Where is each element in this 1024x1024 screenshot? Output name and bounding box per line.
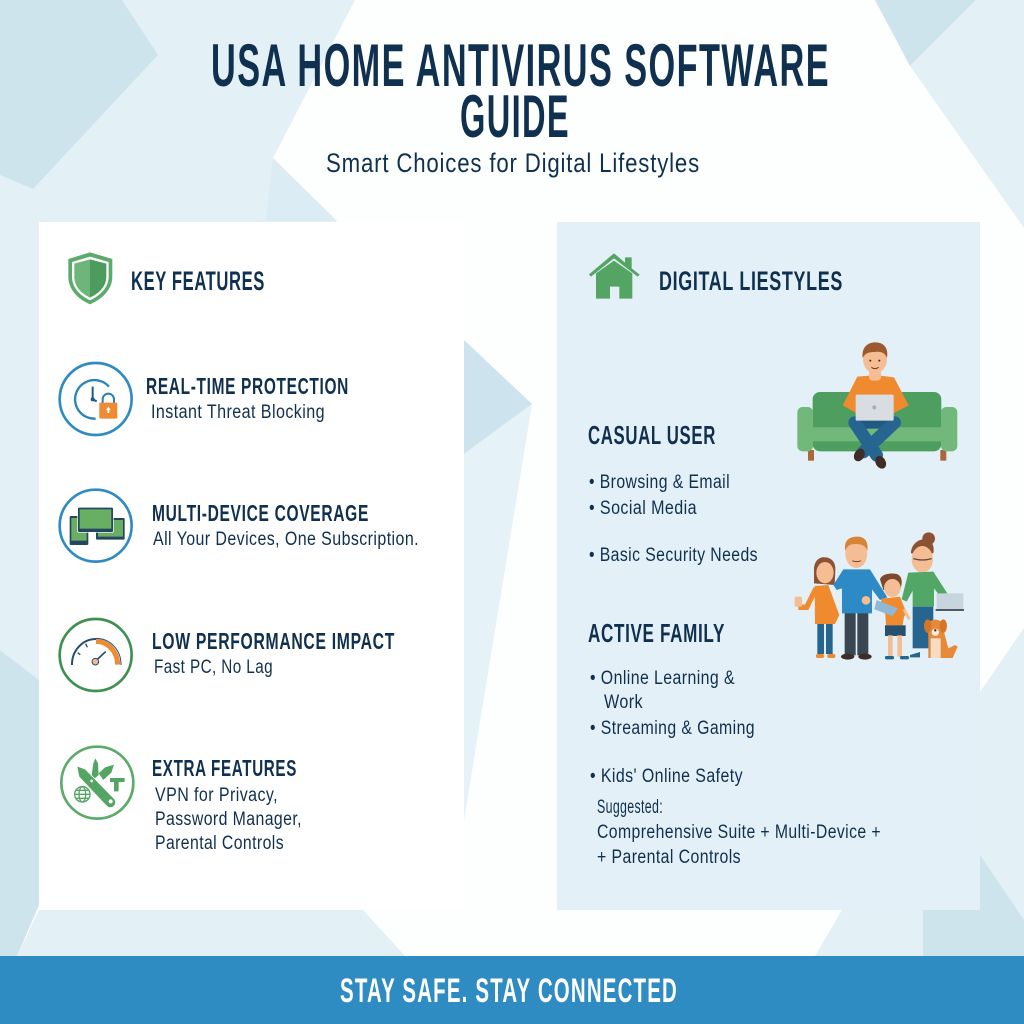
icon: clock and lock <box>60 363 132 435</box>
heading: digital liestyles: DIGITAL LIESTYLES <box>659 266 843 296</box>
bullet list: • Online Learning & <box>590 668 735 689</box>
feature: low performance impact <box>60 619 395 691</box>
heading: key features: KEY FEATURES <box>131 266 265 296</box>
mother <box>922 532 935 545</box>
laptop <box>937 593 963 610</box>
bullet list: • Basic Security Needs <box>589 545 758 566</box>
girl <box>814 557 835 585</box>
text: casual user <box>588 420 758 566</box>
icon: gauge <box>60 619 132 691</box>
bullet list: • Kids' Online Safety <box>590 766 743 787</box>
feature description: Fast PC, No Lag <box>154 657 273 678</box>
dog <box>928 632 958 658</box>
suggestion: Suggested: <box>597 797 663 818</box>
bullet list <box>589 472 758 566</box>
bullet list: • Social Media <box>589 498 697 519</box>
feature description: All Your Devices, One Subscription. <box>153 529 419 550</box>
text: active family <box>588 618 881 868</box>
bullet list <box>590 668 755 787</box>
feature title: EXTRA FEATURES <box>152 755 297 781</box>
title <box>211 32 830 150</box>
icon: shield <box>68 252 112 304</box>
icon: devices <box>60 490 132 562</box>
illustration: man on sofa with laptop <box>797 342 957 471</box>
feature description: Password Manager, <box>155 809 302 830</box>
bullet list: • Browsing & Email <box>589 472 730 493</box>
feature: extra features <box>61 747 302 854</box>
subheading: CASUAL USER <box>588 420 716 450</box>
footer banner: STAY SAFE. STAY CONNECTED <box>340 972 678 1010</box>
suggestion: Comprehensive Suite + Multi-Device + <box>597 822 881 843</box>
subtitle: Smart Choices for Digital Lifestyles <box>326 148 700 178</box>
feature title: REAL-TIME PROTECTION <box>146 373 349 399</box>
girl child <box>880 574 902 590</box>
feature description: Parental Controls <box>155 833 284 854</box>
father <box>845 613 856 655</box>
bullet list: • Streaming & Gaming <box>590 718 755 739</box>
feature description: Instant Threat Blocking <box>151 402 325 423</box>
footer banner <box>0 956 1024 1024</box>
feature description: VPN for Privacy, <box>155 785 278 806</box>
suggestion: + Parental Controls <box>597 847 741 868</box>
feature: multi-device coverage <box>60 490 419 562</box>
decorative facet: blue triangle <box>464 340 532 454</box>
feature title: LOW PERFORMANCE IMPACT <box>152 628 395 654</box>
feature description <box>155 785 302 854</box>
feature title: MULTI-DEVICE COVERAGE <box>152 500 369 526</box>
bullet list: Work <box>604 692 643 713</box>
title: GUIDE <box>460 83 570 150</box>
illustration: family with dog <box>795 532 964 660</box>
decorative facet: pale sliver <box>464 404 532 820</box>
icon: multi-tool <box>61 747 133 819</box>
tablet <box>874 600 898 616</box>
feature: real-time protection <box>60 363 349 435</box>
icon: house <box>589 253 640 299</box>
panel: key features <box>39 222 532 910</box>
panel: digital lifestyles <box>557 222 980 910</box>
suggestion <box>597 797 881 868</box>
subheading: ACTIVE FAMILY <box>588 618 725 648</box>
